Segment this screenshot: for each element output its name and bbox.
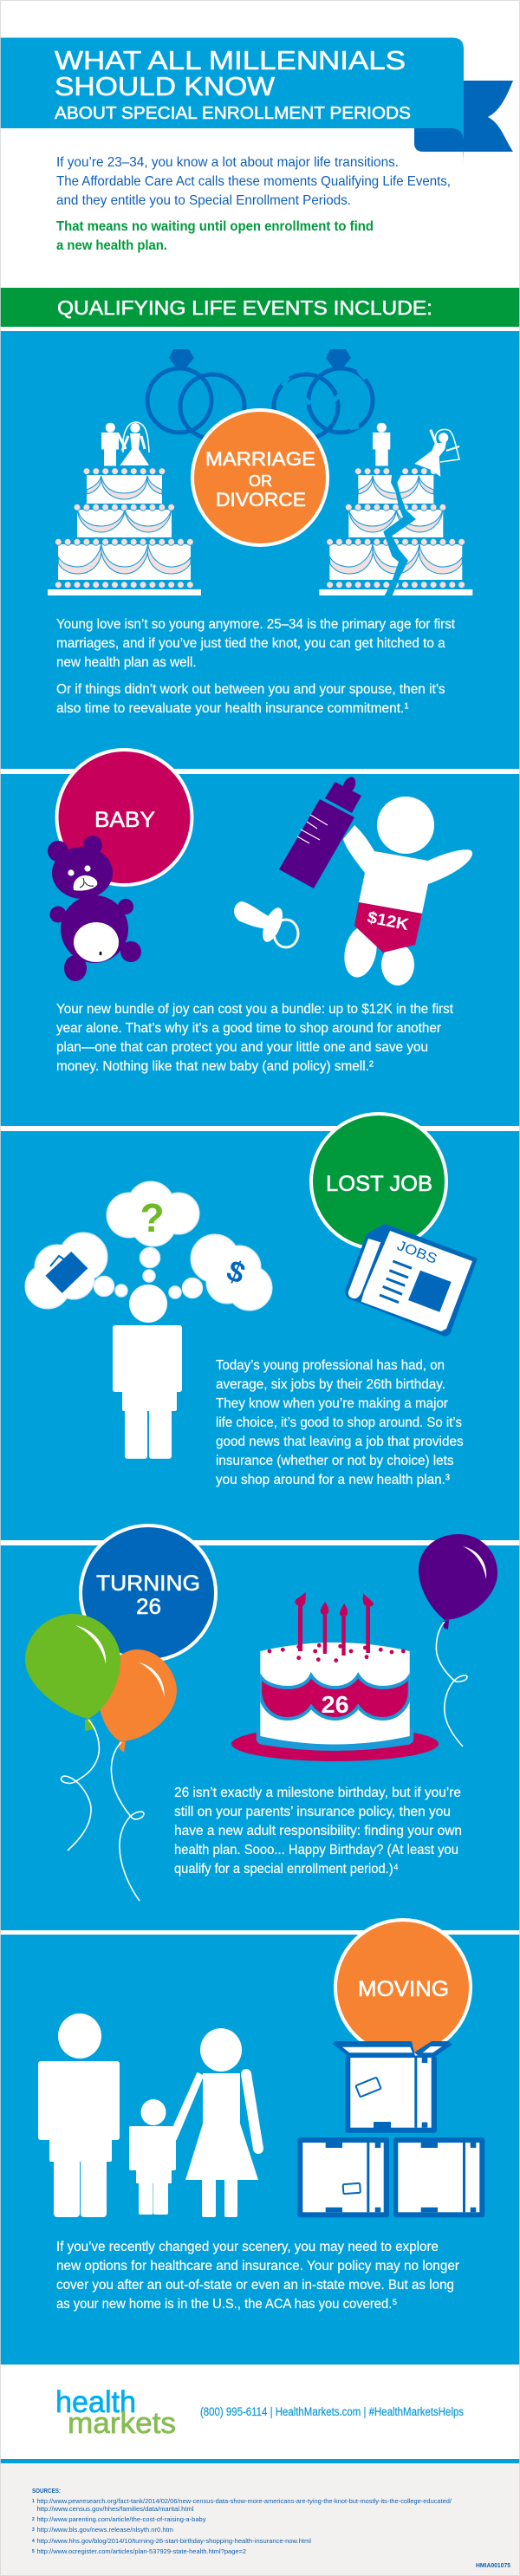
sources list: http://www.pewresearch.org/fact-tank/2014/02/06/new-census-data-show-more-americans-are-tying-the-knot-but-mostly-its-the-college-educated/ [36,2497,452,2505]
text: turning 26 copy: still on your parents’ insurance policy, then you [174,1805,451,1819]
sources list: http://www.hhs.gov/blog/2014/10/turning-26-start-birthday-shopping-health-insurance-now.html [36,2537,311,2545]
groom figure [373,423,390,466]
sources list: 3 [32,2527,35,2533]
text: lost job copy: you shop around for a new health plan.³ [216,1473,451,1487]
icon: baby: $12K [366,908,410,934]
green heading band: QUALIFYING LIFE EVENTS INCLUDE: [57,296,432,319]
sprinkles [268,1643,406,1662]
text: moving copy: new options for healthcare and insurance. Your policy may no longer [56,2259,460,2274]
icon: pacifier [234,901,298,947]
child [129,2099,176,2215]
icon: newspaper [345,1224,478,1337]
woman [172,2028,258,2217]
icon: orange balloon [99,1649,177,1901]
blue background [0,331,520,2365]
intro callout in green: That means no waiting until open enrollment to find [56,219,374,234]
footer sources panel [0,2459,520,2576]
crack [383,467,416,596]
sources list: http://www.census.gov/hhes/families/data/marital.html [36,2505,194,2513]
text: baby copy: year alone. That’s why it’s a good time to shop around for another [56,1021,442,1036]
text: moving copy: as your new home is in the U.S., the ACA has you covered.⁵ [56,2297,397,2312]
text: moving copy [56,2240,460,2312]
panel: lost job [26,1114,478,1487]
text: turning 26 copy [174,1786,462,1877]
top box [333,2041,452,2133]
icon: teddy bear [48,836,141,981]
cloud: briefcase [26,1233,107,1308]
icon: purple balloon [419,1534,497,1747]
sources list: 1 [32,2499,35,2504]
logo: HealthMarkets [55,2385,176,2440]
badge: moving [335,1920,471,2055]
text: baby copy: Your new bundle of joy can cost you a bundle: up to $12K in the first [56,1002,454,1017]
icon: birthday cake: 26 [322,1691,349,1718]
icon: thought clouds [26,1182,271,1310]
text: turning 26 copy: have a new adult responsibility: finding your own [174,1824,462,1838]
text: marriage copy: marriages, and if you’ve just tied the knot, you can get hitched to a [56,636,445,651]
intro callout in green: a new health plan. [56,238,167,253]
panel: turning 26 [25,1525,497,1901]
panel: baby [48,750,472,1074]
intro text [56,155,451,208]
thought bubbles [94,1248,203,1298]
bride and groom topper [101,422,149,466]
title: WHAT ALL MILLENNIALS [55,46,406,75]
panel: moving [38,1920,484,2312]
text: turning 26 copy: qualify for a special enrollment period.)⁴ [174,1862,399,1877]
cloud: dollar: $ [222,1254,250,1291]
icon: birthday cake [231,1591,439,1761]
badge: moving: MOVING [358,1977,449,2001]
title: ABOUT SPECIAL ENROLLMENT PERIODS [55,104,411,123]
text: lost job copy [216,1358,464,1487]
intro callout in green [56,219,374,253]
intro text: If you’re 23–34, you know a lot about major life transitions. [56,155,399,170]
text: moving copy: If you’ve recently changed your scenery, you may need to explore [56,2240,439,2254]
badge: baby: BABY [94,808,155,832]
text: lost job copy: life choice, it’s good to shop around. So it’s [216,1415,462,1430]
badge: turning 26 [81,1525,216,1661]
text: lost job copy: average, six jobs by their 26th birthday. [216,1377,445,1392]
badge: marriage or divorce [192,410,328,545]
icon: wedding rings [147,349,244,439]
badge: marriage or divorce: MARRIAGE [205,448,315,470]
icon: baby [340,797,472,986]
bottom right box [393,2137,484,2217]
text: moving copy: cover you after an out-of-state or even an in-state move. But as long [56,2278,454,2293]
man [38,2013,120,2217]
logo: HealthMarkets: health [55,2385,136,2419]
icon: person [113,1285,182,1459]
text: marriage copy: new health plan as well. [56,655,197,670]
text: turning 26 copy: health plan. Sooo... Happy Birthday? (At least you [174,1843,458,1857]
ribbon banner [0,38,513,165]
text: marriage copy: Young love isn’t so young anymore. 25–34 is the primary age for first [56,617,456,632]
text: turning 26 copy: 26 isn’t exactly a milestone birthday, but if you’re [174,1786,461,1800]
panel: marriage or divorce [48,349,472,716]
badge: marriage or divorce: OR [249,472,272,490]
icon: broken rings [274,349,373,439]
sources list: 4 [32,2539,35,2544]
badge: lost job: LOST JOB [326,1172,432,1196]
sources list: 2 [32,2517,35,2522]
sources list: 5 [32,2549,35,2554]
icon: newspaper: JOBS [395,1239,439,1267]
intro text: and they entitle you to Special Enrollment Periods. [56,193,351,208]
cloud: dollar [192,1235,271,1310]
badge: turning 26: TURNING [96,1571,200,1596]
green heading band [0,288,520,327]
text: lost job copy: Today’s young professional has had, on [216,1358,445,1373]
text: marriage copy: Or if things didn’t work out between you and your spouse, then it’s [56,682,445,697]
sources list: http://www.bls.gov/news.release/nlsyth.nr0.htm [36,2526,173,2534]
contact line: (800) 995-6114 | HealthMarkets.com | #HealthMarketsHelps [200,2405,464,2418]
badge: marriage or divorce: DIVORCE [216,489,306,511]
document code: HMIA001075 [476,2563,510,2569]
sources list: http://www.ocregister.com/articles/plan-537929-state-health.html?page=2 [36,2547,246,2555]
flying bride figure [414,429,459,477]
icon: broken wedding cake [319,423,472,596]
sources list: SOURCES: [32,2487,61,2495]
text: lost job copy: They know when you’re making a major [216,1396,449,1411]
text: baby copy [56,1002,454,1074]
text: baby copy: plan—one that can protect you and your little one and save you [56,1040,428,1055]
badge: lost job [311,1114,446,1249]
candles [295,1591,374,1656]
bottom left box [297,2137,389,2217]
cloud: question: ? [140,1195,165,1240]
text: marriage copy [56,617,456,716]
icon: wedding cake [48,422,201,595]
icon: baby bottle [279,775,361,888]
title [55,46,411,123]
badge: turning 26: 26 [136,1595,161,1619]
sources list: http://www.parenting.com/article/the-cost-of-raising-a-baby [36,2515,206,2523]
text: baby copy: money. Nothing like that new baby (and policy) smell.² [56,1059,374,1074]
intro text: The Affordable Care Act calls these moments Qualifying Life Events, [56,174,451,189]
cloud: question [107,1182,198,1246]
title: SHOULD KNOW [55,72,275,101]
text: marriage copy: also time to reevaluate your health insurance commitment.¹ [56,701,409,716]
text: lost job copy: good news that leaving a job that provides [216,1434,464,1449]
badge: baby [57,750,192,885]
icon: green balloon [25,1614,120,1851]
sources list [32,2487,452,2555]
text: lost job copy: insurance (whether or not by choice) lets [216,1454,454,1468]
logo: HealthMarkets: markets [68,2407,176,2440]
icon: family [38,2013,258,2217]
icon: moving boxes [297,2041,484,2217]
